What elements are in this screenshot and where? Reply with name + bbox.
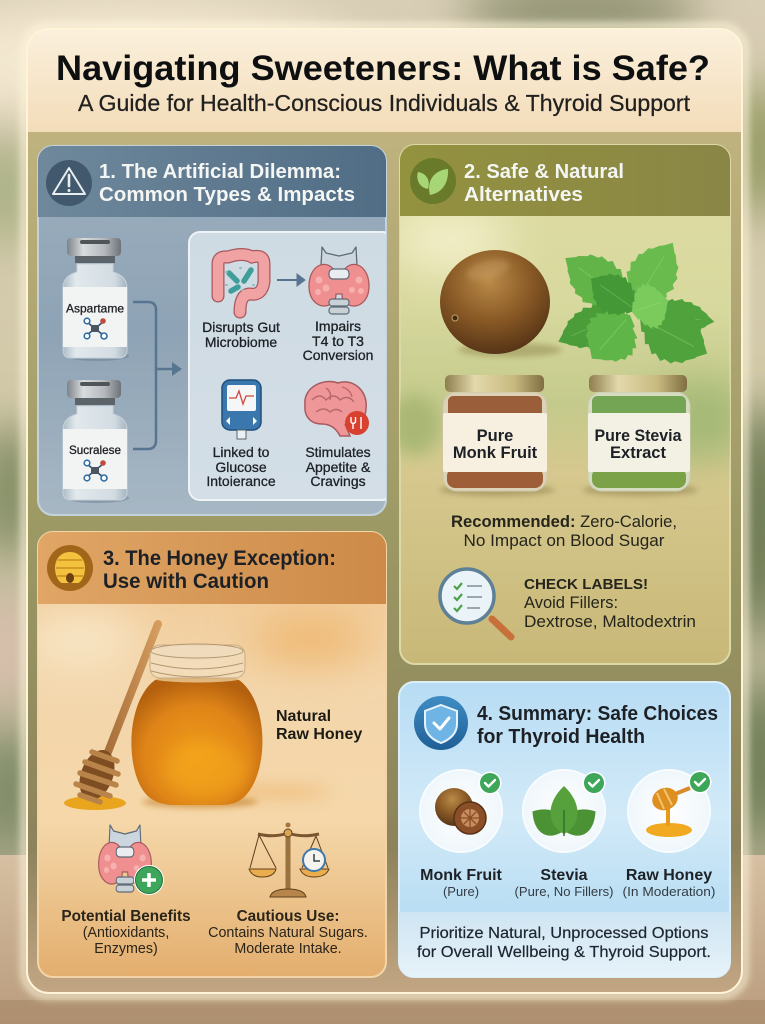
jar: pure stevia extract: Pure Stevia [594, 427, 682, 445]
text: summary message: Prioritize Natural, Unprocessed Options [420, 925, 709, 942]
icon: balance scale with clock [249, 822, 329, 897]
choice: stevia: (Pure, No Fillers) [514, 884, 614, 899]
jar: pure monk fruit: Pure [477, 427, 513, 445]
text: cautious use: Cautious Use: [237, 908, 339, 925]
choice: stevia: Stevia [540, 867, 588, 884]
label: appetite: Cravings [310, 473, 366, 489]
choice: monk fruit: Monk Fruit [420, 867, 503, 884]
label: gut microbiome: Disrupts Gut [202, 319, 280, 335]
icon: thyroid with plus [99, 825, 164, 895]
text: potential benefits: Enzymes) [94, 941, 158, 957]
label: natural raw honey: Natural [276, 708, 331, 725]
label: T4 to T3: Impairs [315, 318, 361, 334]
panel 4: summary [399, 682, 730, 977]
title: Navigating Sweeteners: What is Safe? [56, 49, 710, 88]
choice: monk fruit: (Pure) [443, 884, 479, 899]
label: T4 to T3: Conversion [303, 347, 373, 363]
choice: raw honey [622, 770, 716, 899]
panel 2 heading: 2. Safe & Natural [464, 160, 624, 183]
text: check labels: Avoid Fillers: [524, 594, 618, 612]
choice: stevia [514, 770, 614, 899]
image: monk fruit [440, 250, 562, 357]
label: gut microbiome: Microbiome [205, 334, 277, 350]
label: glucose intolerance: Linked to [213, 444, 270, 460]
text: check labels: CHECK LABELS! [524, 576, 648, 593]
image: stevia leaves [550, 229, 720, 379]
panel 2: safe and natural alternatives [390, 145, 750, 664]
panel 3 heading: 3. The Honey Exception: [103, 547, 336, 570]
panel 3: the honey exception [20, 532, 386, 977]
arrow: bracket to impacts [133, 302, 182, 449]
panel 1 heading: Common Types & Impacts [99, 183, 355, 206]
text: recommended: Recommended: Zero-Calorie, [451, 513, 676, 531]
panel 3 heading [103, 547, 336, 593]
panel 1 heading [99, 160, 355, 206]
panel 1: the artificial dilemma [38, 146, 393, 515]
text: summary message: for Overall Wellbeing & Thyroid Support. [417, 944, 711, 961]
icon: thyroid [309, 247, 369, 314]
jar: pure stevia extract: Extract [610, 444, 666, 462]
label: natural raw honey: Raw Honey [276, 726, 362, 743]
impacts box [189, 232, 393, 500]
vial: aspartame: Aspartame [66, 302, 124, 316]
jar: pure monk fruit [439, 375, 555, 496]
image: honey jar [131, 644, 262, 808]
text: recommended: No Impact on Blood Sugar [464, 532, 665, 550]
choice: monk fruit [420, 770, 503, 899]
text: potential benefits: Potential Benefits [61, 908, 191, 925]
label: appetite: Appetite & [306, 459, 371, 475]
icon: leaf [410, 158, 456, 204]
icon: shield [414, 696, 468, 750]
icon: glucose meter [222, 380, 261, 439]
vial: sucralese [63, 380, 129, 503]
choice: raw honey: (In Moderation) [622, 884, 716, 899]
panel 3 heading: Use with Caution [103, 570, 269, 593]
vial: sucralese: Sucralese [69, 443, 121, 457]
subtitle: A Guide for Health-Conscious Individuals & Thyroid Support [78, 90, 691, 116]
icon: warning triangle [46, 160, 92, 206]
icon: magnifying glass checklist [440, 569, 511, 637]
label: glucose intolerance: Glucose [215, 459, 267, 475]
panel 2 heading [464, 160, 624, 206]
label: T4 to T3: T4 to T3 [312, 333, 364, 349]
arrow: gut to thyroid [277, 274, 305, 286]
icon: gut [218, 254, 264, 312]
jar: pure monk fruit: Monk Fruit [453, 444, 538, 462]
panel 4 heading: 4. Summary: Safe Choices [477, 702, 718, 725]
panel 4 heading: for Thyroid Health [477, 725, 645, 748]
panel 2 heading: Alternatives [464, 183, 583, 206]
text: check labels: Dextrose, Maltodextrin [524, 613, 696, 631]
text: potential benefits: (Antioxidants, [83, 925, 169, 941]
icon: beehive [47, 545, 93, 591]
text: cautious use: Contains Natural Sugars. [208, 925, 368, 941]
choice: raw honey: Raw Honey [626, 867, 712, 884]
jar: pure stevia extract [582, 375, 698, 496]
text: cautious use: Moderate Intake. [234, 941, 342, 957]
label: appetite: Stimulates [305, 444, 371, 460]
panel 4 heading [477, 702, 718, 748]
image: honey dipper and puddle [64, 624, 158, 810]
vial: aspartame [63, 238, 129, 361]
icon: brain [305, 382, 369, 436]
label: glucose intolerance: Intoierance [206, 473, 276, 489]
panel 1 heading: 1. The Artificial Dilemma: [99, 160, 341, 183]
